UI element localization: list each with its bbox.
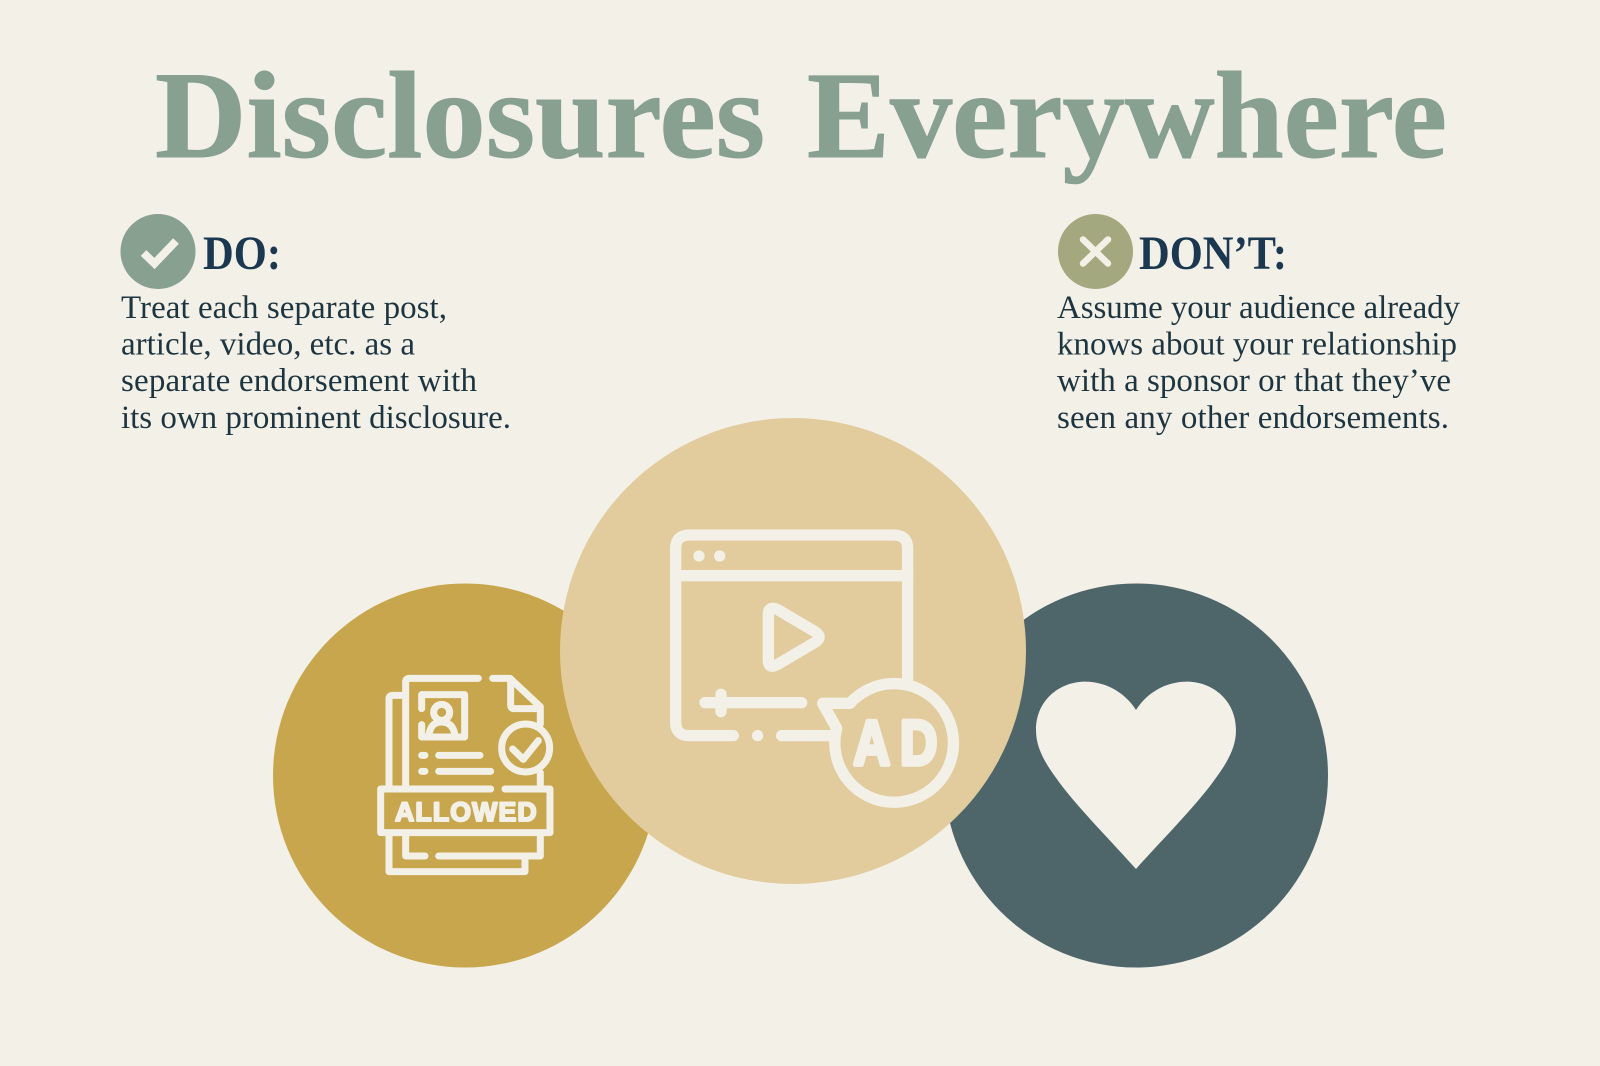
text: do body: article, video, etc. as a: [121, 326, 415, 362]
title: Everywhere: [807, 47, 1447, 184]
text: don't body: [1057, 290, 1460, 436]
text: do body: Treat each separate post,: [121, 290, 447, 326]
heading: do: DO:: [203, 227, 281, 280]
text: don't body: Assume your audience already: [1057, 290, 1460, 326]
text: don't body: seen any other endorsements.: [1057, 400, 1449, 436]
panel: video ad circle: [560, 418, 1026, 884]
text: don't body: with a sponsor or that they’ve: [1057, 363, 1451, 399]
icon: video ad window: D: [900, 708, 937, 778]
icon: heart: [1036, 682, 1236, 869]
text: don't body: knows about your relationship: [1057, 326, 1457, 362]
icon: video ad window: [676, 535, 953, 802]
icon: allowed document: ALLOWED: [395, 797, 537, 827]
text: do body: [121, 290, 511, 436]
text: do body: its own prominent disclosure.: [121, 400, 511, 436]
icon: video ad window: A: [853, 708, 890, 778]
panel: allowed circle: [273, 584, 657, 968]
panel: do: [120, 214, 511, 436]
icon: allowed document: [381, 678, 550, 872]
panel: don't: [1057, 214, 1460, 436]
panel: heart circle: [944, 584, 1328, 968]
title: [155, 47, 1447, 184]
title: Disclosures: [155, 47, 765, 184]
heading: don't: DON’T:: [1139, 227, 1287, 280]
icon: cross badge: [1058, 214, 1133, 289]
text: do body: separate endorsement with: [121, 363, 478, 399]
icon: check badge: [120, 214, 196, 289]
